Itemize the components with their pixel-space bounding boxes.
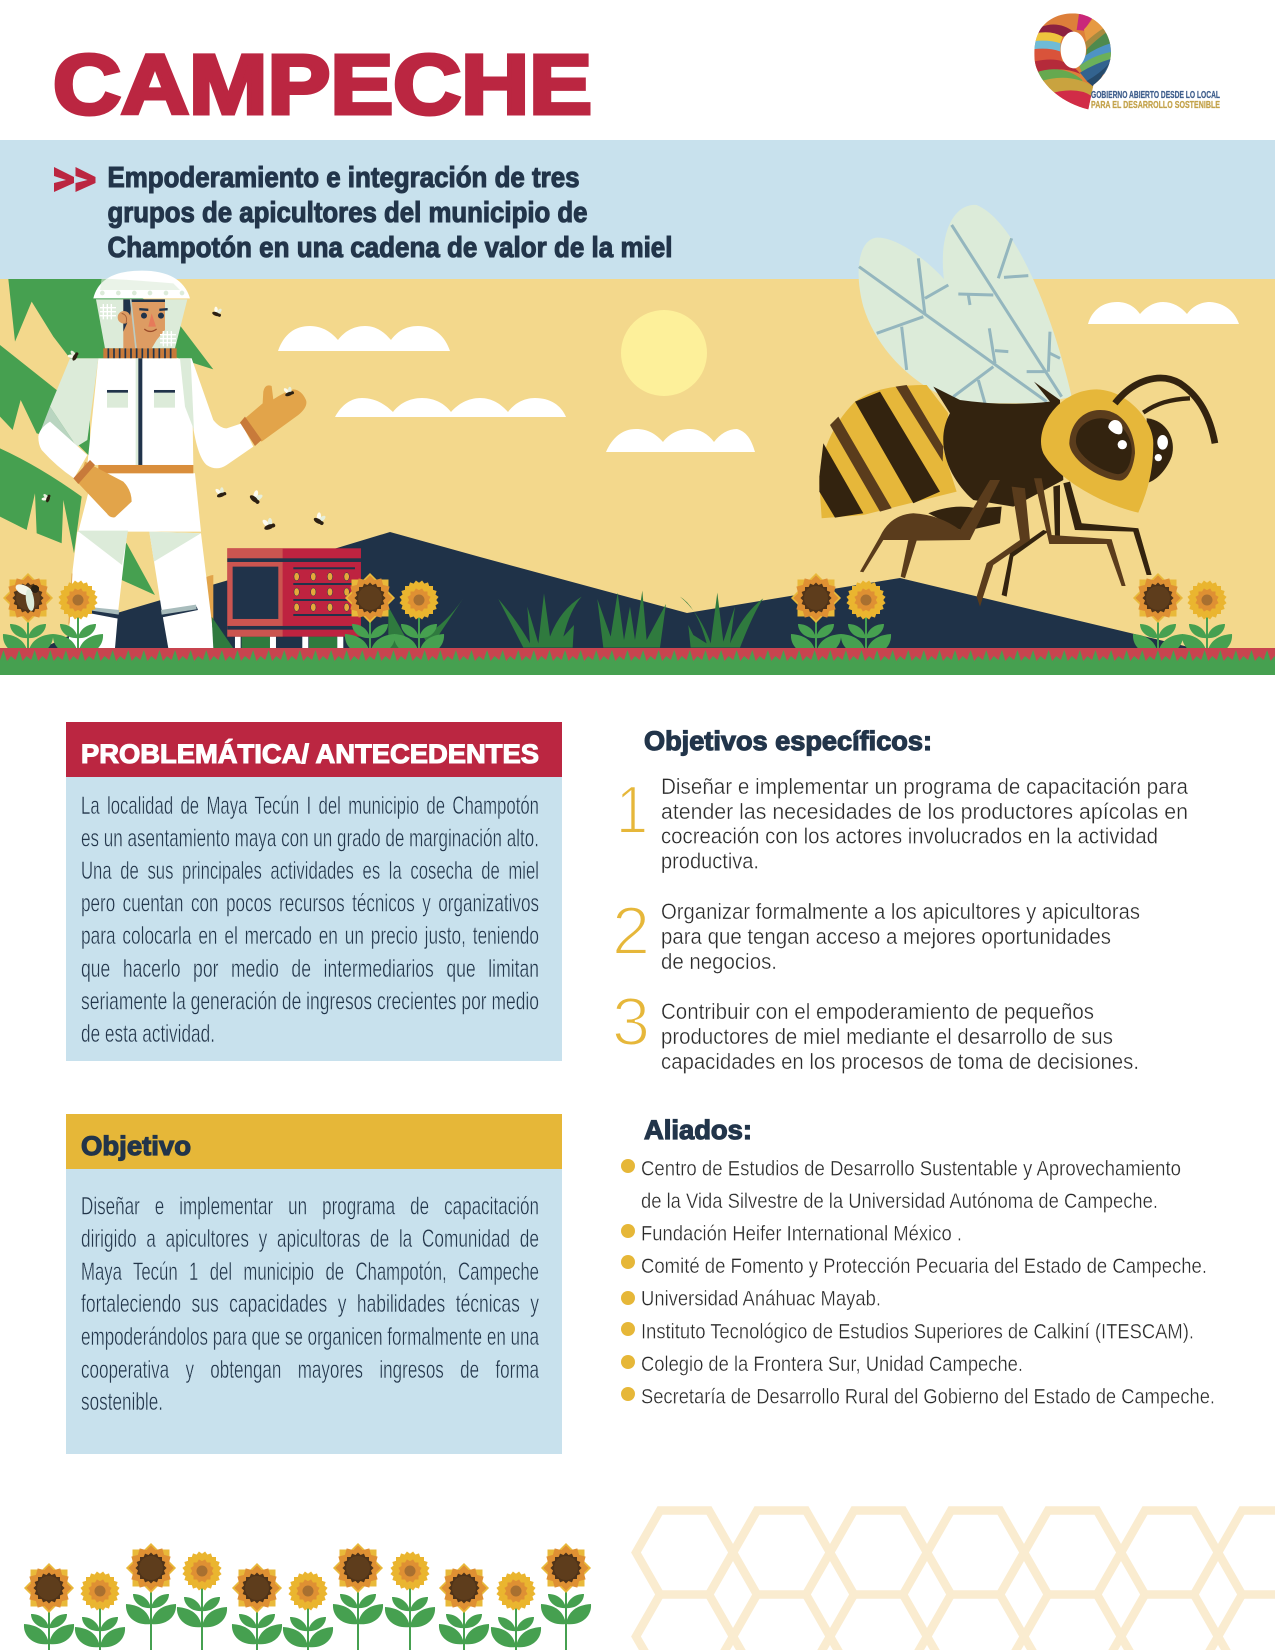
objective 3 text: Contribuir con el empoderamiento de pequeños [661, 999, 1094, 1024]
orange smoker shapes behind legs [206, 575, 214, 626]
list: aliados [621, 1156, 1215, 1408]
paragraph: sostenible. [81, 1388, 163, 1416]
beehive [212, 548, 463, 648]
subtitle: Champotón en una cadena de valor de la miel [108, 232, 672, 264]
paragraph: Una de sus principales actividades es la cosecha de miel [81, 857, 539, 885]
paragraph: empoderándolos para que se organicen formalmente en una [81, 1323, 539, 1351]
list text: de la Vida Silvestre de la Universidad Autónoma de Campeche. [641, 1189, 1158, 1213]
objective 2 [612, 893, 1140, 974]
bee on flower [16, 584, 39, 611]
honeycomb pattern [636, 1510, 1275, 1650]
panel body [66, 1169, 562, 1454]
sunflower row [24, 1543, 591, 1650]
icon: double chevron [54, 167, 96, 192]
paragraph: fortaleciendo sus capacidades y habilidades técnicas y [81, 1290, 539, 1318]
heading: PROBLEMÁTICA/ ANTECEDENTES [81, 738, 539, 769]
objective 1 text: atender las necesidades de los productores apícolas en [661, 799, 1188, 824]
mesh patches [100, 304, 176, 346]
sunflowers in scene [3, 573, 1232, 654]
paragraph: Diseñar e implementar un programa de capacitación [81, 1192, 539, 1220]
pockets [107, 392, 128, 408]
panel header [66, 1114, 562, 1169]
subtitle: Empoderamiento e integración de tres [108, 162, 580, 194]
panel header [66, 722, 562, 777]
objective 3 [612, 984, 1139, 1074]
heading: aliados: Aliados: [644, 1115, 752, 1145]
objective 1 [616, 772, 1189, 874]
list text: Centro de Estudios de Desarrollo Sustentable y Aprovechamiento [641, 1156, 1181, 1180]
panel body [66, 776, 562, 1061]
bee legs [928, 507, 1002, 532]
list text [641, 1156, 1215, 1408]
heading: objetivos específicos: Objetivos específicos: [644, 726, 932, 756]
illustration: hero scene [0, 205, 1275, 675]
logo: gobierno abierto [1030, 10, 1220, 113]
big bee [819, 205, 1215, 607]
list text: Instituto Tecnológico de Estudios Superiores de Calkiní (ITESCAM). [641, 1320, 1194, 1344]
objective 1 text: productiva. [661, 848, 759, 874]
objective 1 text: Diseñar e implementar un programa de capacitación para [661, 774, 1189, 799]
objective 2 text: para que tengan acceso a mejores oportunidades [661, 924, 1111, 949]
paragraph: La localidad de Maya Tecún I del municipio de Champotón [81, 792, 539, 820]
bee head [1041, 389, 1153, 513]
pants [78, 473, 201, 532]
paragraph: Maya Tecún 1 del municipio de Champotón, Campeche [81, 1258, 539, 1286]
sky [0, 279, 1275, 651]
icon: rainbow map pin [1034, 13, 1111, 110]
sun [621, 310, 707, 396]
beekeeper [38, 271, 306, 648]
paragraph [81, 1192, 539, 1416]
logo text [1091, 89, 1220, 111]
objective 2 text: de negocios. [661, 949, 777, 974]
bee antennae [1115, 378, 1215, 443]
palm leaves [0, 279, 213, 595]
small bees [40, 305, 328, 531]
panel: objetivo [66, 1114, 562, 1454]
objective 3 text [661, 999, 1139, 1074]
mountains [43, 532, 1193, 651]
objective 2 text: Organizar formalmente a los apicultores y apicultoras [661, 899, 1140, 924]
number 1: 1 [616, 772, 648, 848]
collar [103, 348, 177, 358]
paragraph: pero cuentan con pocos recursos técnicos y organizativos [81, 890, 539, 918]
objective 3 text: capacidades en los procesos de toma de decisiones. [661, 1049, 1139, 1074]
paragraph: dirigido a apicultores y apicultoras de la Comunidad de [81, 1225, 539, 1253]
face [123, 299, 165, 348]
bee thorax [933, 382, 1063, 507]
bee abdomen [819, 385, 957, 518]
subtitle [108, 162, 672, 264]
paragraph: que hacerlo por medio de intermediarios que limitan [81, 955, 539, 983]
paragraph: seriamente la generación de ingresos crecientes por medio [81, 988, 539, 1016]
number 3: 3 [612, 984, 650, 1060]
objective 1 text: cocreación con los actores involucrados en la actividad [661, 824, 1158, 848]
list text: Universidad Anáhuac Mayab. [641, 1286, 881, 1310]
helmet [93, 271, 190, 298]
objective 3 text: productores de miel mediante el desarrollo de sus [661, 1024, 1113, 1049]
panel: problemática [66, 722, 562, 1061]
clouds [278, 302, 1239, 452]
number 2: 2 [612, 893, 650, 969]
list text: Colegio de la Frontera Sur, Unidad Campeche. [641, 1352, 1023, 1376]
gloves [78, 462, 132, 517]
subtitle: grupos de apicultores del municipio de [108, 197, 588, 229]
bee second eye [1147, 418, 1173, 483]
objective 2 text [661, 899, 1140, 974]
paragraph: para colocarla en el mercado en un precio justo, teniendo [81, 922, 539, 950]
title: CAMPECHE [53, 38, 592, 132]
band: light blue subtitle background [0, 140, 1275, 280]
bullets [621, 1159, 635, 1401]
heading: Objetivo [81, 1131, 191, 1161]
suit [87, 358, 193, 465]
grass clumps [498, 591, 763, 648]
grass strip [0, 648, 1275, 675]
paragraph: cooperativa y obtengan mayores ingresos de forma [81, 1356, 539, 1384]
paragraph [81, 792, 539, 1048]
bee wings [859, 205, 1072, 403]
objective 1 text [661, 774, 1189, 874]
paragraph: es un asentamiento maya con un grado de marginación alto. [81, 824, 539, 852]
list text: Fundación Heifer International México . [641, 1222, 962, 1246]
paragraph: de esta actividad. [81, 1020, 215, 1048]
